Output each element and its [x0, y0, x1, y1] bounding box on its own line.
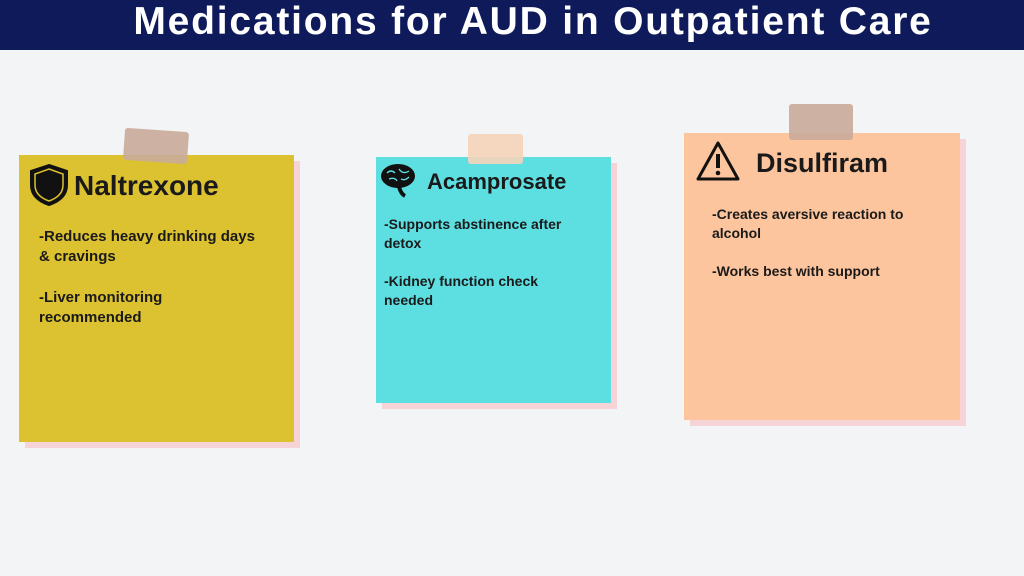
panel: Naltrexone — [19, 155, 294, 442]
text block: -Supports abstinence after — [384, 216, 561, 232]
text block: -Works best with support — [712, 263, 880, 279]
text block: -Kidney function check — [384, 273, 538, 289]
text block: & cravings — [39, 248, 116, 265]
tape — [468, 134, 523, 164]
tape — [789, 104, 853, 140]
panel: Acamprosate — [376, 157, 611, 403]
text block: -Reduces heavy drinking days — [39, 228, 255, 245]
tape — [123, 128, 189, 164]
text block: detox — [384, 235, 421, 251]
text block: alcohol — [712, 225, 761, 241]
heading: Acamprosate — [427, 169, 566, 194]
heading: Disulfiram — [756, 148, 888, 178]
text block — [384, 216, 562, 308]
icon: brain — [381, 164, 415, 198]
heading: Naltrexone — [74, 170, 219, 201]
icon: shield — [30, 164, 68, 206]
panel: Disulfiram — [684, 133, 960, 420]
title: Medications for AUD in Outpatient Care — [133, 0, 933, 43]
text block: -Creates aversive reaction to — [712, 206, 903, 222]
text block — [712, 206, 903, 279]
text block: needed — [384, 292, 433, 308]
header band — [0, 0, 1024, 50]
text block — [39, 228, 255, 326]
text block: -Liver monitoring — [39, 289, 162, 306]
icon: warning — [696, 141, 740, 180]
text block: recommended — [39, 309, 142, 326]
